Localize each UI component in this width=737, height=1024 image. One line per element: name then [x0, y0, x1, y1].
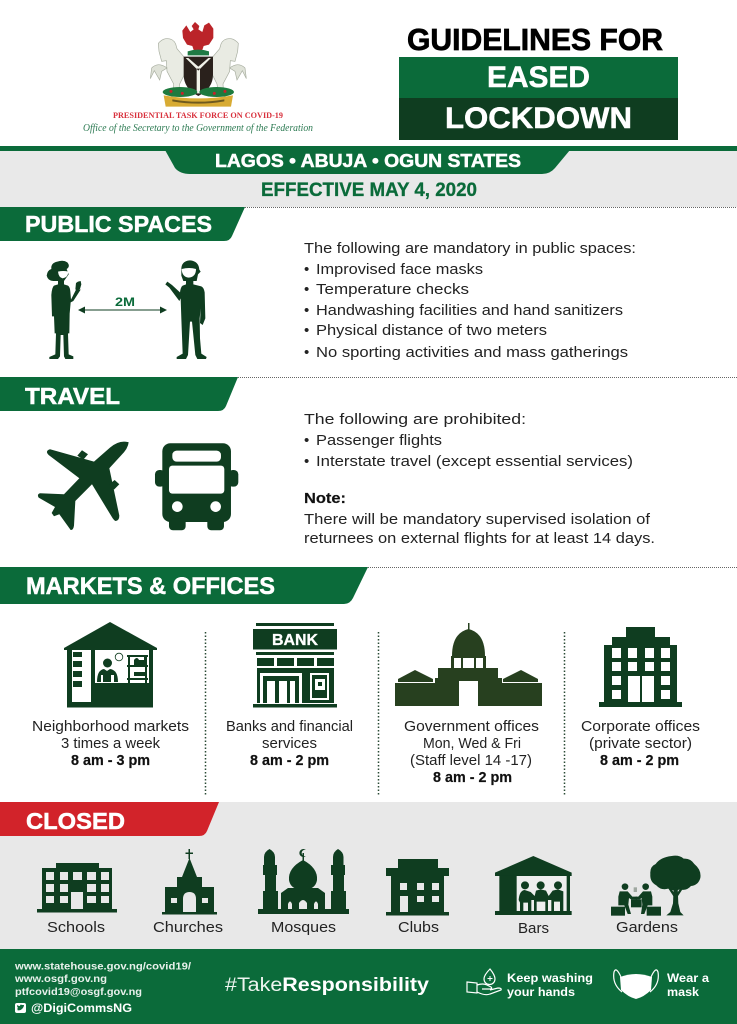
ribbon: states: [165, 150, 570, 174]
icon: garden: [611, 856, 701, 916]
emblem: Nigerian coat of arms: [150, 22, 246, 107]
text block: travel rules: The following are prohibited:: [304, 411, 526, 428]
text block: travel rules: Interstate travel (except essential services): [316, 453, 633, 470]
section heading: public spaces: [0, 207, 245, 241]
text: wear a mask: [667, 973, 710, 999]
text: corporate offices: (private sector): [589, 735, 692, 752]
text block: public spaces rules: •: [304, 261, 309, 278]
text block: public spaces rules: •: [304, 281, 309, 298]
label: churches: Churches: [153, 919, 223, 936]
hashtag: #Take Responsibility: [225, 975, 429, 996]
panel: closed background: [0, 802, 737, 949]
icon: two masked people two meters apart: [47, 260, 207, 359]
icon: school: [37, 863, 117, 912]
icon: mosque: [258, 849, 349, 914]
ribbon: states: LAGOS • ABUJA • OGUN STATES: [215, 151, 521, 171]
text block: public spaces rules: Handwashing facilities and hand sanitizers: [316, 302, 623, 319]
text block: travel rules: Passenger flights: [316, 432, 442, 449]
text block: public spaces rules: •: [304, 344, 309, 361]
distance arrow: [78, 306, 167, 314]
text: wear a mask: mask: [667, 987, 700, 999]
icon: face mask: [614, 970, 658, 999]
text: banks: [226, 718, 353, 769]
icon: government building: [395, 623, 542, 707]
section heading: markets and offices: MARKETS & OFFICES: [26, 573, 275, 600]
text block: public spaces rules: [304, 240, 636, 361]
text: neighborhood markets: Neighborhood markets: [32, 718, 189, 735]
section heading: markets and offices: [0, 567, 368, 604]
text block: public spaces rules: •: [304, 322, 309, 339]
text block: travel rules: There will be mandatory supervised isolation of: [304, 511, 651, 528]
man figure: [165, 260, 207, 359]
text block: travel rules: •: [304, 432, 309, 449]
icon: corporate office: [599, 627, 682, 707]
text: neighborhood markets: 3 times a week: [61, 735, 160, 752]
label: mosques: Mosques: [271, 919, 336, 936]
text block: public spaces rules: •: [304, 302, 309, 319]
section heading: closed: CLOSED: [26, 808, 125, 834]
text: banks: services: [262, 735, 317, 752]
office name: Office of the Secretary to the Government of the Federation: [83, 123, 313, 134]
taskforce name: PRESIDENTIAL TASK FORCE ON COVID-19: [113, 110, 283, 120]
label: gardens: Gardens: [616, 919, 678, 936]
twitter handle: @DigiCommsNG: [31, 1001, 132, 1015]
effective date: EFFECTIVE MAY 4, 2020: [261, 179, 477, 201]
text: government offices: Government offices: [404, 718, 539, 735]
text block: travel rules: returnees on external flights for at least 14 days.: [304, 530, 655, 547]
icon: bank: [253, 623, 337, 708]
title box: lockdown: LOCKDOWN: [445, 102, 632, 135]
distance label: 2M: [115, 295, 135, 309]
footer contact links: www.osgf.gov.ng: [14, 973, 107, 985]
icon: bar: [495, 856, 572, 915]
label: schools: Schools: [47, 919, 105, 936]
footer contact links: [14, 960, 191, 998]
icon: bus: [155, 443, 238, 530]
text block: travel rules: •: [304, 453, 309, 470]
text: government offices: 8 am - 2 pm: [433, 769, 512, 786]
label: bars: Bars: [518, 920, 549, 937]
panel: footer background: [0, 949, 737, 1024]
text: government offices: Mon, Wed & Fri: [423, 735, 521, 752]
icon: bank: BANK: [272, 632, 319, 649]
text: banks: 8 am - 2 pm: [250, 752, 329, 769]
footer contact links: www.statehouse.gov.ng/covid19/: [14, 960, 191, 972]
header band with gray background: [0, 146, 737, 207]
text: government offices: [404, 718, 539, 786]
text block: public spaces rules: Physical distance of two meters: [316, 322, 547, 339]
text block: travel rules: Note:: [304, 490, 346, 507]
icon: club: [386, 859, 449, 916]
icon: washing hands: [467, 969, 501, 995]
text: keep washing your hands: your hands: [507, 987, 575, 999]
text: keep washing your hands: Keep washing: [507, 973, 593, 985]
text: wear a mask: Wear a: [667, 973, 710, 985]
text block: public spaces rules: The following are mandatory in public spaces:: [304, 240, 636, 257]
title: guidelines for: GUIDELINES FOR: [407, 22, 663, 57]
title box: eased: [399, 57, 678, 98]
text: government offices: (Staff level 14 -17): [410, 752, 532, 769]
text: keep washing your hands: [507, 973, 593, 999]
text: neighborhood markets: 8 am - 3 pm: [71, 752, 150, 769]
text block: public spaces rules: Improvised face masks: [316, 261, 483, 278]
section heading: travel: TRAVEL: [25, 383, 120, 409]
icon: neighborhood market: [64, 622, 157, 708]
footer contact links: ptfcovid19@osgf.gov.ng: [15, 986, 142, 998]
text: banks: Banks and financial: [226, 718, 353, 735]
icon: church: [162, 849, 217, 914]
label: clubs: Clubs: [398, 919, 439, 936]
text block: public spaces rules: Temperature checks: [316, 281, 469, 298]
section heading: travel: [0, 377, 238, 411]
text block: public spaces rules: No sporting activities and mass gatherings: [316, 344, 628, 361]
text: corporate offices: [581, 718, 700, 769]
icon: airplane: [38, 442, 129, 530]
title box: eased: EASED: [487, 61, 590, 94]
woman figure: [47, 261, 81, 359]
text: corporate offices: Corporate offices: [581, 718, 700, 735]
text block: travel rules: [304, 411, 655, 547]
text: corporate offices: 8 am - 2 pm: [600, 752, 679, 769]
section heading: closed: [0, 802, 219, 836]
title box: lockdown: [399, 98, 678, 140]
section heading: public spaces: PUBLIC SPACES: [25, 211, 212, 237]
text: neighborhood markets: [32, 718, 189, 769]
